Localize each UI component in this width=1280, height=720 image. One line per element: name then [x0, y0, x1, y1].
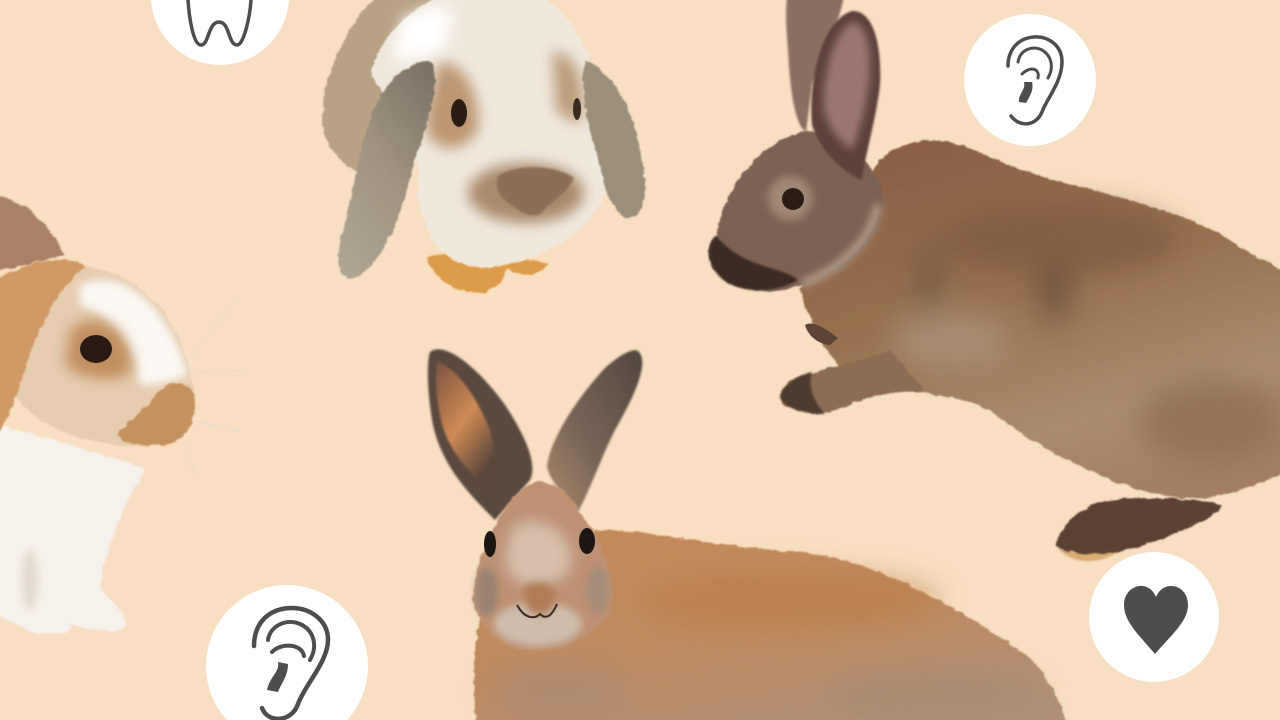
eye ring — [768, 176, 812, 220]
back ear — [786, 0, 845, 132]
rabbit: lop-eared top centre — [322, 0, 645, 293]
lop eye left — [451, 99, 467, 127]
lop head — [372, 0, 605, 267]
front ear — [811, 11, 880, 180]
front ear inner — [824, 22, 870, 150]
lop body — [322, 0, 440, 172]
eye — [80, 335, 112, 363]
head — [709, 130, 883, 291]
front legs — [781, 350, 925, 413]
lop nose — [497, 167, 574, 215]
icon: ear badge bottom left — [206, 585, 368, 720]
lop head tan patches — [395, 8, 584, 223]
white body — [0, 420, 145, 634]
front paw dark — [780, 372, 825, 414]
rabbit: brown jumping right — [709, 0, 1280, 561]
icon: heart badge — [1089, 552, 1219, 682]
body — [800, 141, 1280, 498]
muzzle — [494, 602, 582, 646]
rabbit: orange bottom centre — [428, 349, 1072, 720]
icon: tooth badge — [151, 0, 289, 65]
eye patch — [65, 320, 132, 379]
rabbit: white and tan left — [0, 193, 250, 634]
muzzle dark — [709, 236, 798, 290]
white body shadow — [22, 550, 38, 610]
face grey sides — [476, 566, 609, 616]
neck light ring — [802, 205, 878, 284]
ear lop — [0, 259, 85, 452]
orange body — [474, 530, 1072, 720]
eye right — [579, 528, 595, 554]
mouth — [517, 604, 557, 617]
muzzle — [118, 383, 195, 445]
lop ear left — [338, 61, 435, 279]
lop ear right — [583, 60, 645, 218]
whiskers — [185, 295, 250, 475]
tucked paw — [805, 323, 838, 345]
icon: ear badge top right — [964, 14, 1096, 146]
hind foot rim — [1056, 546, 1125, 561]
white blaze — [80, 280, 188, 385]
nose — [522, 583, 557, 616]
left ear inner — [436, 362, 494, 490]
lop eye right — [573, 98, 581, 120]
hind foot — [1056, 498, 1222, 554]
ear upper — [0, 193, 65, 272]
eye — [782, 188, 804, 210]
body shading — [890, 205, 1280, 460]
lop feet — [427, 250, 549, 293]
head — [473, 482, 612, 650]
orange body shading — [490, 572, 1040, 720]
right ear — [547, 350, 642, 512]
left ear — [428, 349, 532, 520]
eye left — [484, 531, 496, 557]
head — [10, 264, 195, 446]
face pale patch — [506, 521, 572, 585]
